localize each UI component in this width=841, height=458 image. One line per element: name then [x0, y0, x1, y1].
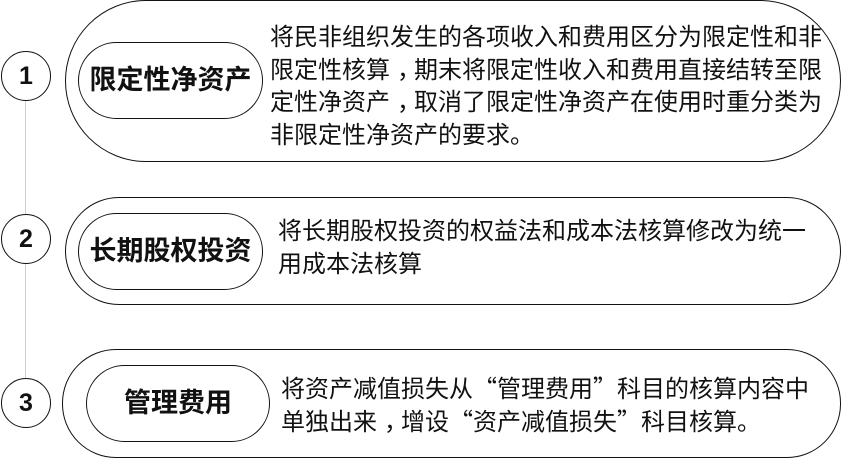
text block: item 3 description: ” — [593, 369, 617, 404]
heading: 限定性净资产 — [78, 42, 263, 119]
text block: item 2 description: 将长期股权投资的权益法和成本法核算修改为统一 — [278, 218, 806, 245]
panel: item 3 — [62, 349, 841, 458]
step number 2 — [1, 214, 51, 264]
text block: item 1 description — [270, 24, 822, 149]
text block: item 3 description: ” — [617, 402, 641, 437]
step number 1: 1 — [19, 62, 33, 90]
text block: item 1 description: 定性净资产 ，取消了限定性净资产在使用时重分类为 — [270, 89, 822, 116]
text block: item 3 description: “ — [473, 369, 497, 404]
step number 3 — [1, 378, 51, 428]
text block: item 2 description — [278, 218, 806, 278]
heading: 限定性净资产: 限定性净资产 — [90, 65, 252, 95]
text block: item 3 description: 将资产减值损失从 管理费用 科目的核算内容中 — [281, 376, 809, 403]
heading: 管理费用: 管理费用 — [124, 388, 232, 418]
heading: 长期股权投资: 长期股权投资 — [90, 236, 252, 266]
connector line — [25, 100, 26, 380]
text block: item 3 description — [281, 369, 809, 437]
heading: 长期股权投资 — [78, 213, 263, 290]
text block: item 1 description: 将民非组织发生的各项收入和费用区分为限定性和非 — [270, 24, 822, 51]
text block: item 1 description: 非限定性净资产的要求。 — [270, 122, 534, 149]
step number 1 — [1, 51, 51, 101]
step number 3: 3 — [19, 389, 33, 417]
step number 2: 2 — [19, 225, 33, 253]
heading: 管理费用 — [86, 365, 270, 442]
text block: item 3 description: 单独出来 ，增设 资产减值损失 科目核算。 — [281, 409, 761, 436]
panel: item 1 — [65, 0, 841, 162]
panel: item 2 — [65, 197, 841, 305]
text block: item 3 description: “ — [449, 402, 473, 437]
text block: item 2 description: 用成本法核算 — [278, 251, 422, 278]
text block: item 1 description: 限定性核算 ，期末将限定性收入和费用直接结转至限 — [270, 57, 822, 84]
